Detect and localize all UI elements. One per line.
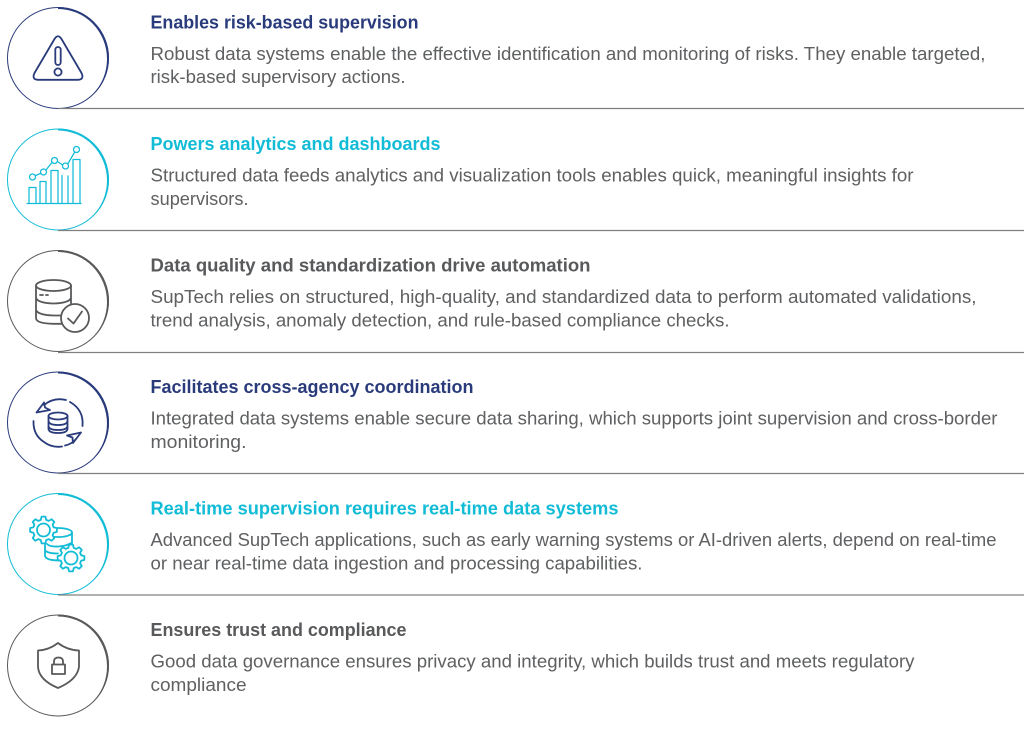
text block	[150, 287, 976, 330]
text block	[150, 530, 996, 574]
text block: Advanced SupTech applications, such as early warning systems or AI-driven alerts, depend on real-time	[150, 530, 996, 550]
icon: database with check in circle	[8, 250, 109, 352]
icon: shield with lock in circle	[8, 614, 109, 716]
heading: Data quality and standardization drive automation	[150, 256, 590, 276]
text block: compliance	[150, 675, 246, 695]
icon: bar and line chart in circle	[8, 128, 109, 230]
panel: risk-based supervision	[8, 7, 1024, 109]
text block	[150, 652, 914, 695]
text block: SupTech relies on structured, high-quality, and standardized data to perform automated validations,	[150, 287, 976, 307]
heading: Powers analytics and dashboards	[150, 134, 440, 154]
panel: data quality and standardization	[8, 250, 1024, 352]
heading: Enables risk-based supervision	[150, 12, 418, 32]
text block: risk-based supervisory actions.	[150, 67, 406, 87]
icon: database with circular arrows in circle	[8, 372, 109, 474]
text block: or near real-time data ingestion and processing capabilities.	[150, 554, 642, 574]
icon: warning triangle in circle	[8, 7, 109, 109]
panel: real-time supervision	[8, 493, 1024, 595]
panel: cross-agency coordination	[8, 372, 1024, 474]
text block: trend analysis, anomaly detection, and rule-based compliance checks.	[150, 310, 730, 330]
heading: Facilitates cross-agency coordination	[150, 377, 474, 397]
text block: monitoring.	[150, 432, 246, 452]
heading: Ensures trust and compliance	[150, 620, 406, 640]
text block	[150, 44, 986, 87]
heading: Real-time supervision requires real-time data systems	[150, 498, 618, 518]
text block: Structured data feeds analytics and visualization tools enables quick, meaningful insights for	[150, 166, 914, 186]
panel: trust and compliance	[8, 614, 914, 716]
icon: gears and database in circle	[8, 493, 109, 595]
text block: Good data governance ensures privacy and integrity, which builds trust and meets regulatory	[150, 652, 914, 672]
text block: supervisors.	[150, 189, 248, 209]
text block: Integrated data systems enable secure data sharing, which supports joint supervision and cross-border	[150, 408, 998, 428]
text block: Robust data systems enable the effective identification and monitoring of risks. They enable targeted,	[150, 44, 986, 64]
text block	[150, 166, 914, 209]
text block	[150, 408, 998, 452]
panel: analytics and dashboards	[8, 128, 1024, 230]
